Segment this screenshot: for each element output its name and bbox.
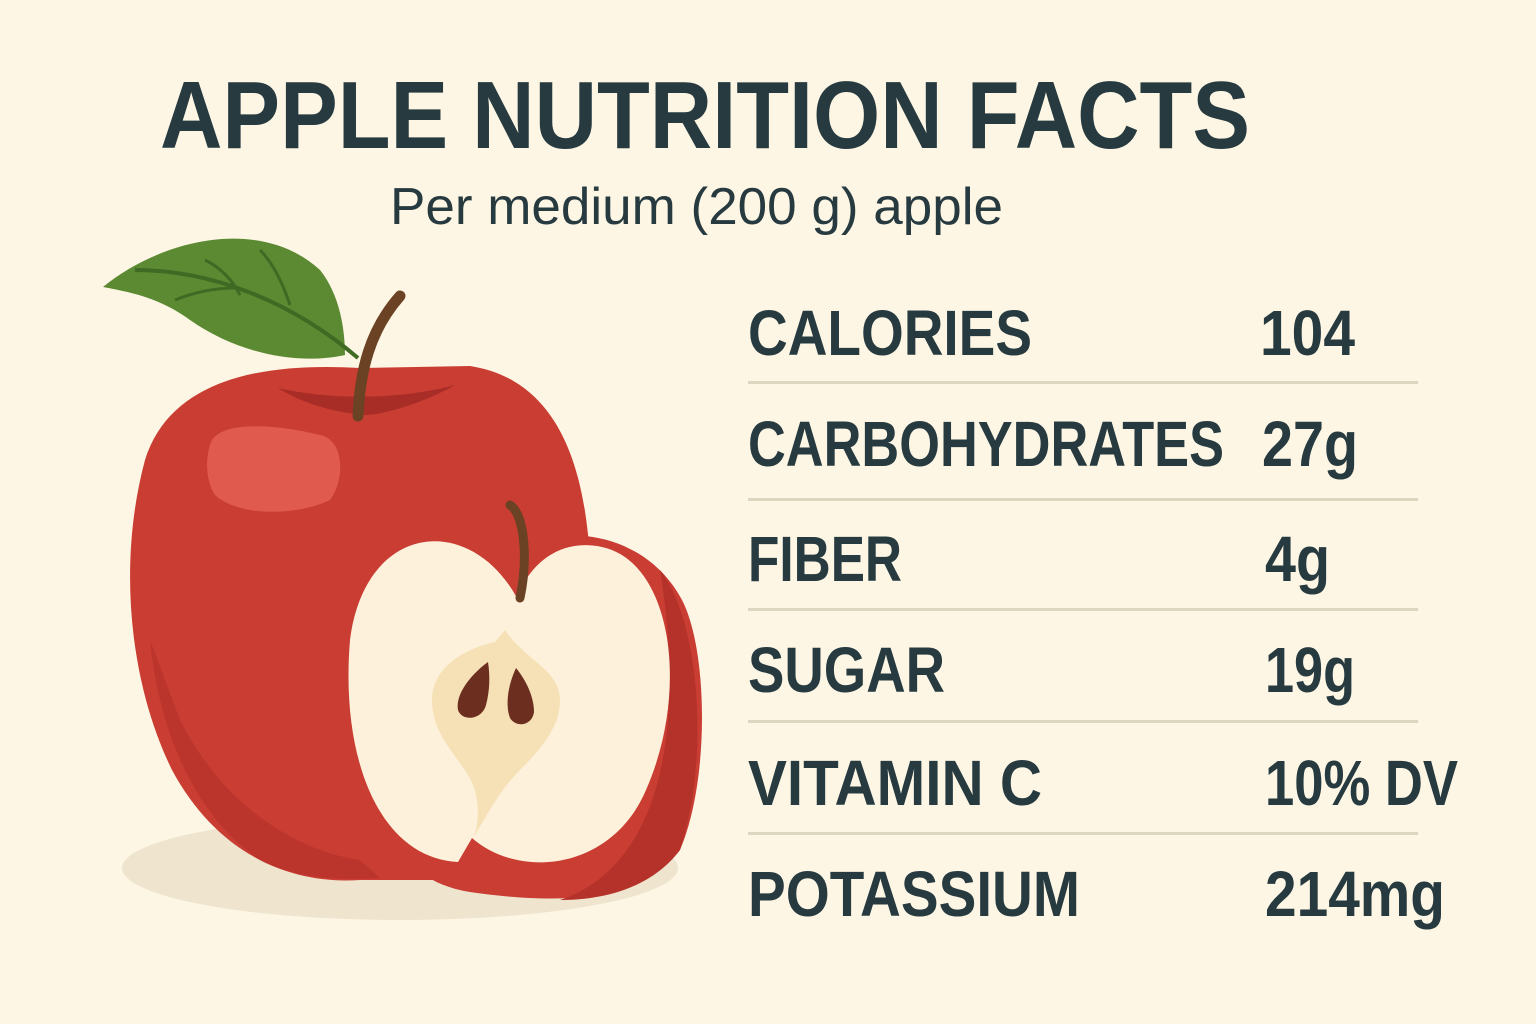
row: sugar xyxy=(748,634,1355,706)
subtitle: Per medium (200 g) apple xyxy=(390,178,1003,236)
row: calories xyxy=(748,297,1355,369)
stem xyxy=(358,296,400,416)
row: potassium: POTASSIUM xyxy=(748,858,1080,930)
row: vitamin c: 10% DV xyxy=(1265,747,1458,819)
row: calories: CALORIES xyxy=(748,297,1032,369)
whole apple xyxy=(130,366,590,880)
row: potassium xyxy=(748,858,1445,930)
row: calories: 104 xyxy=(1260,297,1355,369)
title: APPLE NUTRITION FACTS xyxy=(160,62,1250,169)
seeds xyxy=(458,662,489,718)
row: sugar: 19g xyxy=(1265,634,1355,706)
row: carbohydrates: 27g xyxy=(1262,408,1358,480)
illustration: apple xyxy=(103,239,702,920)
row: carbohydrates: CARBOHYDRATES xyxy=(748,408,1224,480)
leaf xyxy=(103,239,358,359)
shadow xyxy=(122,816,678,920)
row: potassium: 214mg xyxy=(1265,858,1445,930)
row: vitamin c xyxy=(748,747,1458,819)
row: fiber: 4g xyxy=(1265,523,1330,595)
row: sugar: SUGAR xyxy=(748,634,945,706)
half apple xyxy=(340,505,702,900)
nutrition table xyxy=(748,297,1458,930)
row: fiber xyxy=(748,523,1330,595)
row: vitamin c: VITAMIN C xyxy=(748,747,1042,819)
row: fiber: FIBER xyxy=(748,523,902,595)
